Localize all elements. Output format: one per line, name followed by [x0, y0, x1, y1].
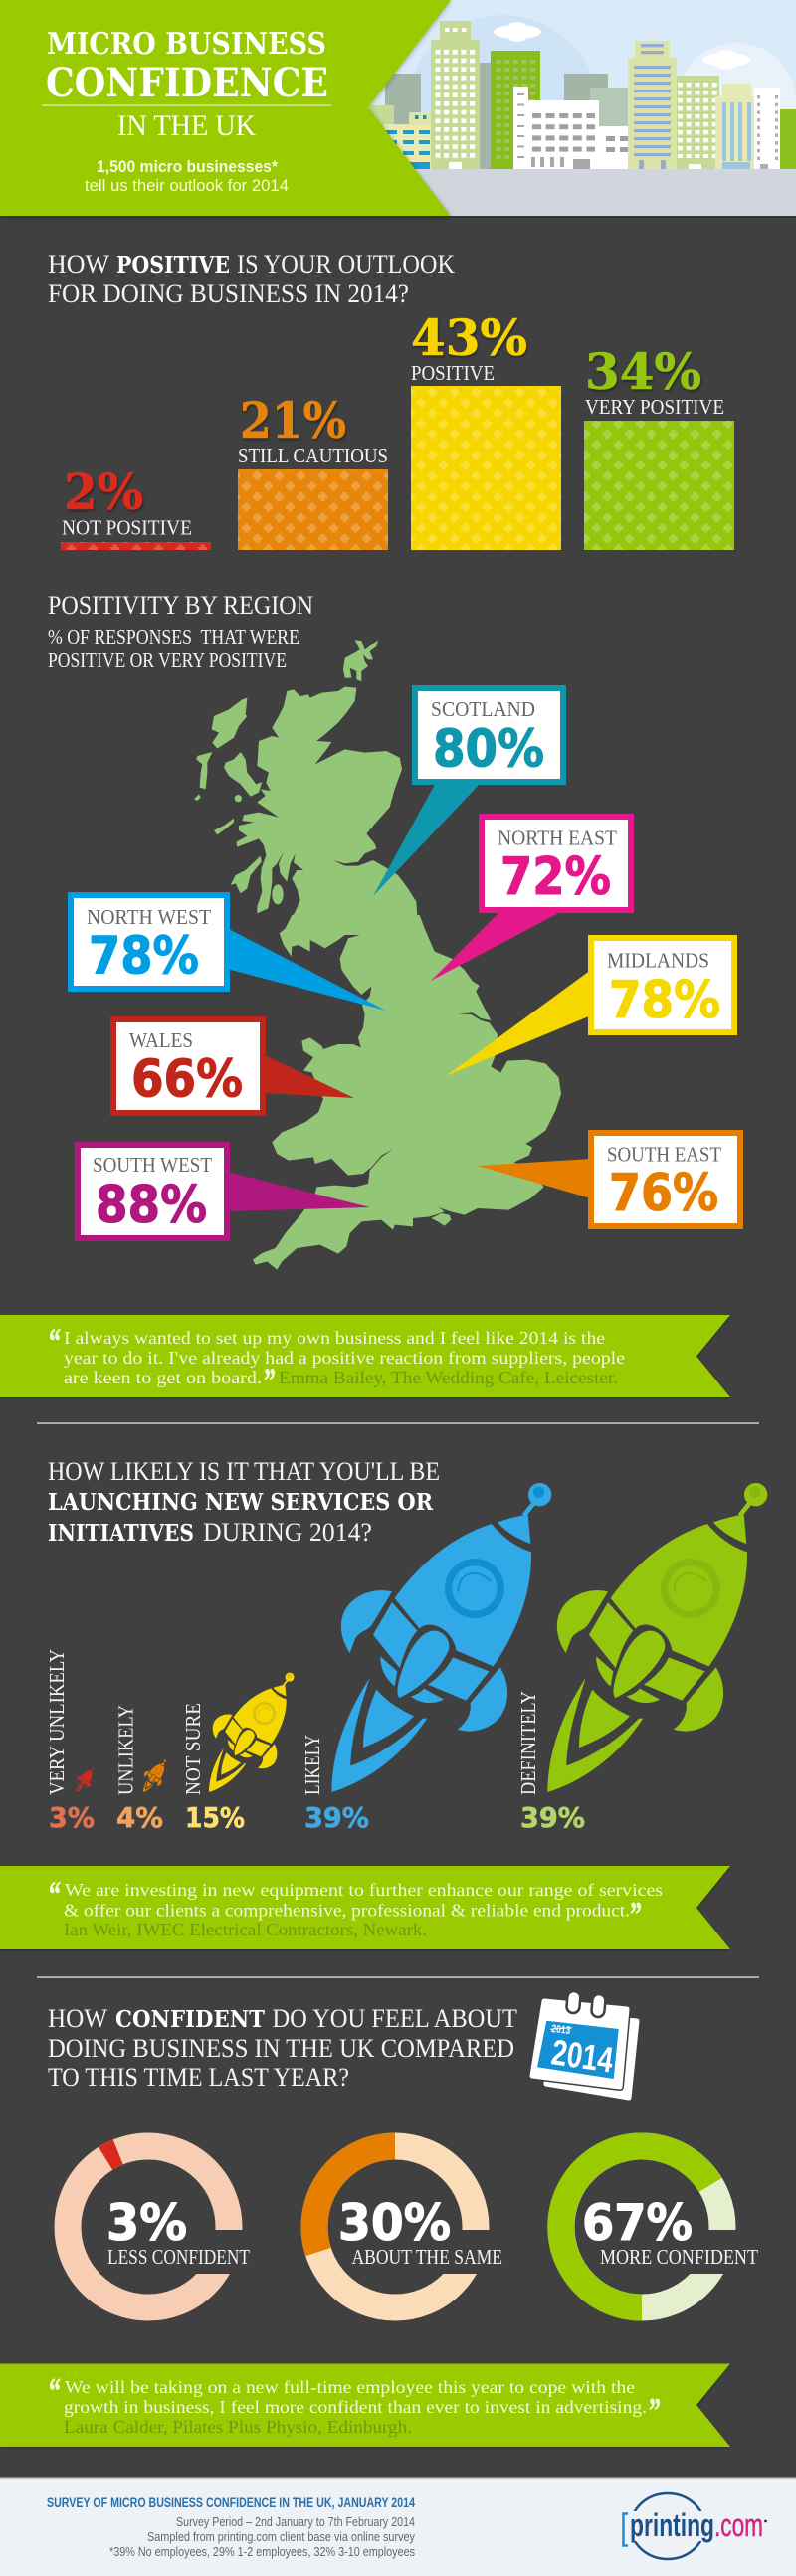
- callout: Scotland: [373, 688, 563, 896]
- quote banner: Laura Calder: “: [49, 2371, 61, 2411]
- section: launching question heading: INITIATIVES: [48, 1520, 194, 1547]
- quote banner: Emma Bailey: “: [49, 1321, 61, 1361]
- callout: North East: [431, 817, 631, 981]
- section: launching question heading: LAUNCHING NEW SERVICES OR: [48, 1489, 434, 1516]
- bar: very positive 34%: [584, 342, 734, 550]
- logo: printing.com: printing: [630, 2507, 714, 2543]
- section: launching question heading: DURING 2014?: [203, 1518, 372, 1547]
- callout: Midlands: MIDLANDS: [607, 949, 709, 973]
- section: outlook question heading: IS YOUR OUTLOOK: [237, 250, 455, 278]
- section: confidence question heading: DO YOU FEEL ABOUT: [273, 2004, 517, 2033]
- donut: more confident 67%: MORE CONFIDENT: [600, 2245, 758, 2269]
- quote banner: Ian Weir: “: [49, 1874, 61, 1914]
- callout: North East: 72%: [500, 847, 611, 907]
- section: outlook question heading: [48, 250, 455, 308]
- quote banner: Emma Bailey: I always wanted to set up my own business and I feel like 2014 is the: [64, 1328, 605, 1348]
- icon: calendar 2014: 2013: [551, 2023, 571, 2037]
- bar: positive 43%: POSITIVE: [411, 361, 495, 385]
- section: region heading: [48, 591, 313, 672]
- rocket: very unlikely: [45, 1649, 95, 1834]
- bar chart: outlook: [61, 308, 734, 550]
- callout: Midlands: [446, 938, 734, 1076]
- donut: about the same 30%: ABOUT THE SAME: [352, 2245, 502, 2269]
- callout: South West: SOUTH WEST: [93, 1153, 212, 1177]
- callout: South West: [78, 1145, 370, 1238]
- donut: about the same 30%: [314, 2146, 502, 2307]
- rocket: very unlikely: VERY UNLIKELY: [45, 1649, 69, 1795]
- rocket: not sure: 15%: [185, 1801, 245, 1834]
- quote banner: Emma Bailey: year to do it. I've already had a positive reaction from suppliers, people: [64, 1348, 625, 1368]
- rocket: unlikely: UNLIKELY: [113, 1705, 137, 1795]
- callout: Midlands: 78%: [609, 971, 720, 1030]
- quote banner: Laura Calder: ”: [649, 2391, 661, 2431]
- callout: Scotland: 80%: [433, 720, 544, 780]
- rocket: definitely: DEFINITELY: [516, 1691, 540, 1795]
- subtitle: 1,500 micro businesses*: [97, 157, 278, 176]
- bar: very positive 34%: 34%: [585, 342, 701, 401]
- rocket: unlikely: 4%: [116, 1801, 163, 1834]
- quote banner: Laura Calder: Laura Calder, Pilates Plus Physio, Edinburgh.: [64, 2417, 412, 2437]
- survey notes: [47, 2495, 415, 2559]
- section: launching question heading: HOW LIKELY IS IT THAT YOU'LL BE: [48, 1457, 440, 1486]
- callout: South East: [478, 1133, 740, 1226]
- callout: North West: [71, 895, 386, 1011]
- rocket: likely: [300, 1483, 551, 1834]
- section: region heading: POSITIVE OR VERY POSITIVE: [48, 648, 287, 672]
- donut: less confident 3%: [68, 2146, 251, 2307]
- quote banner: Ian Weir: & offer our clients a comprehensive, professional & reliable end product.: [64, 1900, 630, 1920]
- quote banner: Ian Weir: We are investing in new equipment to further enhance our range of services: [65, 1880, 663, 1900]
- logo: printing.com: .com: [714, 2507, 763, 2543]
- bar: positive 43%: [411, 308, 561, 550]
- bar: not positive 2%: NOT POSITIVE: [62, 515, 192, 539]
- icon: calendar 2014: 2014: [549, 2031, 616, 2081]
- donut: more confident 67%: [561, 2146, 758, 2307]
- subtitle: tell us their outlook for 2014: [85, 176, 289, 195]
- callout: South East: SOUTH EAST: [607, 1143, 721, 1167]
- quote banner: Emma Bailey: are keen to get on board.: [64, 1368, 262, 1387]
- quote banner: Laura Calder: growth in business, I feel more confident than ever to invest in advertising.: [64, 2397, 647, 2417]
- quote banner: Ian Weir: ”: [630, 1894, 642, 1933]
- section: confidence question heading: HOW: [48, 2004, 107, 2033]
- quote banner: Emma Bailey: [0, 1315, 730, 1400]
- rocket: unlikely: [113, 1705, 166, 1834]
- section: outlook question heading: FOR DOING BUSINESS IN 2014?: [48, 279, 409, 308]
- donut: more confident 67%: 67%: [582, 2194, 693, 2252]
- callout: Wales: [113, 1019, 354, 1113]
- section: launching question heading: [48, 1457, 440, 1547]
- rocket: definitely: [516, 1483, 767, 1834]
- rocket: likely: LIKELY: [300, 1735, 324, 1795]
- title: [42, 27, 331, 142]
- donut: less confident 3%: 3%: [106, 2194, 187, 2252]
- rocket: not sure: [181, 1673, 295, 1834]
- section: confidence question heading: DOING BUSINESS IN THE UK COMPARED: [48, 2034, 514, 2063]
- bar: very positive 34%: VERY POSITIVE: [585, 395, 724, 419]
- section: region heading: POSITIVITY BY REGION: [48, 591, 313, 620]
- rocket: very unlikely: 3%: [49, 1801, 95, 1834]
- rocket: likely: 39%: [304, 1801, 369, 1834]
- section: confidence question heading: CONFIDENT: [115, 2006, 265, 2033]
- bar: not positive 2%: [61, 462, 211, 550]
- callout: North East: NORTH EAST: [498, 826, 617, 849]
- section: outlook question heading: POSITIVE: [116, 252, 230, 278]
- survey notes: Sampled from printing.com client base via online survey: [147, 2529, 415, 2544]
- section: region heading: % OF RESPONSES THAT WERE: [48, 625, 299, 648]
- green title panel: [0, 0, 451, 217]
- title: MICRO BUSINESS: [47, 27, 326, 62]
- bar: not positive 2%: 2%: [64, 462, 143, 521]
- rocket: definitely: 39%: [520, 1801, 585, 1834]
- survey notes: SURVEY OF MICRO BUSINESS CONFIDENCE IN THE UK, JANUARY 2014: [47, 2495, 415, 2510]
- quote banner: Laura Calder: [0, 2363, 730, 2447]
- quote banner: Emma Bailey: ”: [264, 1361, 276, 1400]
- donut: about the same 30%: 30%: [338, 2194, 451, 2252]
- bar: still cautious 21%: [238, 391, 388, 550]
- logo: printing.com: [622, 2493, 771, 2559]
- section: confidence question heading: [48, 2004, 517, 2092]
- rockets chart: [45, 1483, 767, 1834]
- donut: less confident 3%: LESS CONFIDENT: [107, 2245, 250, 2269]
- title: IN THE UK: [117, 109, 256, 142]
- bar: still cautious 21%: STILL CAUTIOUS: [238, 444, 388, 467]
- callout: North West: NORTH WEST: [87, 905, 211, 929]
- callout: Wales: WALES: [129, 1028, 193, 1052]
- title: CONFIDENCE: [46, 60, 328, 106]
- callout: North West: 78%: [89, 927, 199, 987]
- bar: positive 43%: 43%: [411, 308, 527, 367]
- rocket: not sure: NOT SURE: [181, 1703, 205, 1795]
- survey notes: Survey Period – 2nd January to 7th February 2014: [176, 2514, 415, 2529]
- section: outlook question heading: HOW: [48, 250, 109, 278]
- quote banner: Laura Calder: We will be taking on a new full-time employee this year to cope with the: [65, 2377, 635, 2397]
- section: confidence question heading: TO THIS TIME LAST YEAR?: [48, 2063, 349, 2092]
- map: Great Britain: [194, 640, 561, 1270]
- illustration: city skyline: [358, 0, 796, 217]
- survey notes: *39% No employees, 29% 1-2 employees, 32% 3-10 employees: [109, 2544, 415, 2559]
- callout: Scotland: SCOTLAND: [431, 697, 535, 721]
- callout: South West: 88%: [96, 1176, 207, 1235]
- quote banner: Ian Weir: [0, 1866, 730, 1949]
- icon: calendar 2014: [532, 1991, 637, 2098]
- header banner: [0, 0, 796, 218]
- quote banner: Ian Weir: Ian Weir, IWEC Electrical Contractors, Newark.: [64, 1920, 427, 1939]
- subtitle: [85, 157, 289, 195]
- footer: [0, 2477, 796, 2576]
- callout: Wales: 66%: [131, 1050, 243, 1110]
- callout: South East: 76%: [609, 1164, 718, 1223]
- bar: still cautious 21%: 21%: [240, 391, 346, 450]
- quote banner: Emma Bailey: Emma Bailey, The Wedding Cafe, Leicester.: [279, 1368, 618, 1387]
